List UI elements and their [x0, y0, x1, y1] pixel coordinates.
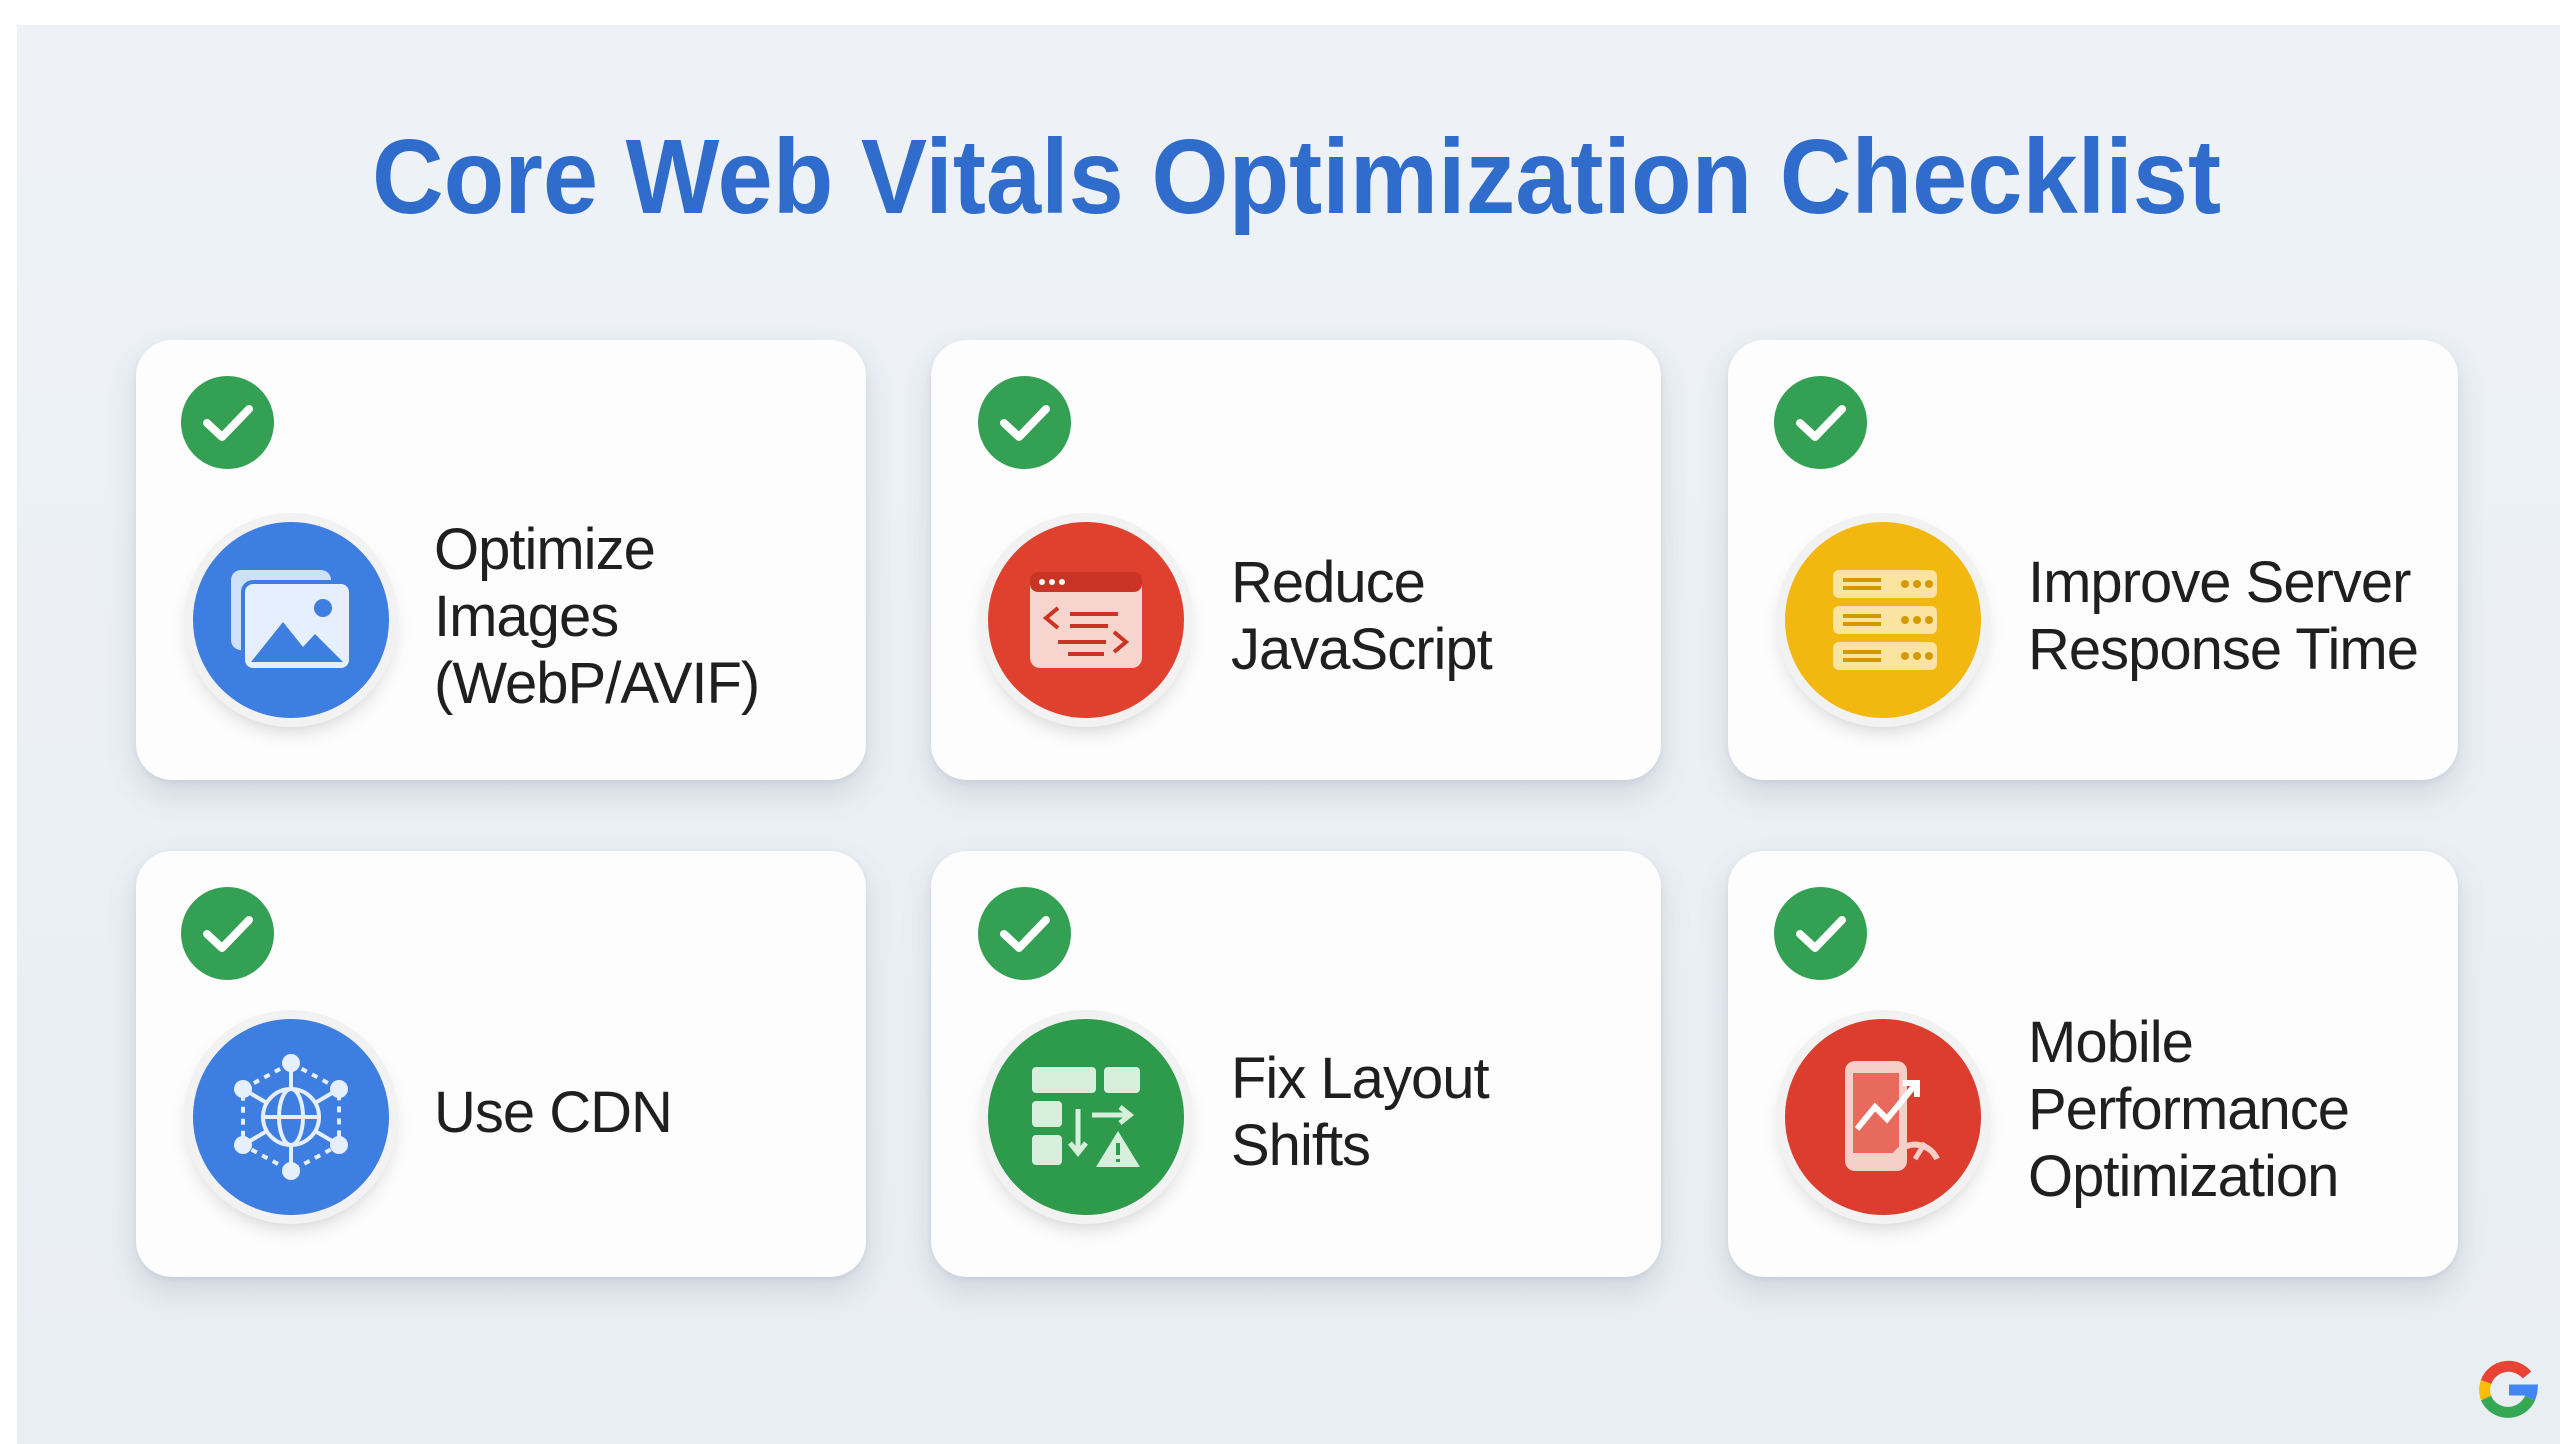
icon: check [1774, 887, 1867, 980]
text [434, 517, 759, 716]
text: (WebP/AVIF) [434, 651, 759, 716]
icon: mobile [1785, 1019, 1981, 1215]
text: JavaScript [1231, 617, 1492, 682]
text: Mobile [2028, 1010, 2193, 1075]
text: Improve Server [2028, 550, 2410, 615]
text [1231, 1046, 1490, 1178]
panel: optimize images [136, 340, 866, 780]
panel: server response [1728, 340, 2458, 780]
panel: use cdn [136, 851, 866, 1277]
icon: google logo [2479, 1360, 2538, 1418]
icon: images [193, 522, 389, 718]
icon: check [978, 376, 1071, 469]
text: Images [434, 584, 618, 649]
panel: reduce javascript [931, 340, 1661, 780]
icon: network globe [193, 1019, 389, 1215]
icon: layout [988, 1019, 1184, 1215]
title: Core Web Vitals Optimization Checklist [372, 118, 2221, 236]
text: Performance [2028, 1077, 2349, 1142]
text: Optimization [2028, 1144, 2338, 1209]
icon: check [978, 887, 1071, 980]
icon: code [988, 522, 1184, 718]
text: Reduce [1231, 550, 1425, 615]
text: Use CDN [434, 1080, 672, 1145]
text [2028, 1010, 2349, 1209]
text: Shifts [1231, 1113, 1370, 1178]
panel: fix layout shifts [931, 851, 1661, 1277]
text [2028, 550, 2418, 682]
icon: check [181, 376, 274, 469]
text: Fix Layout [1231, 1046, 1489, 1111]
icon: check [1774, 376, 1867, 469]
icon: check [181, 887, 274, 980]
panel: mobile performance [1728, 851, 2458, 1277]
text [1231, 550, 1492, 682]
text: Response Time [2028, 617, 2418, 682]
text: Optimize [434, 517, 655, 582]
icon: server [1785, 522, 1981, 718]
